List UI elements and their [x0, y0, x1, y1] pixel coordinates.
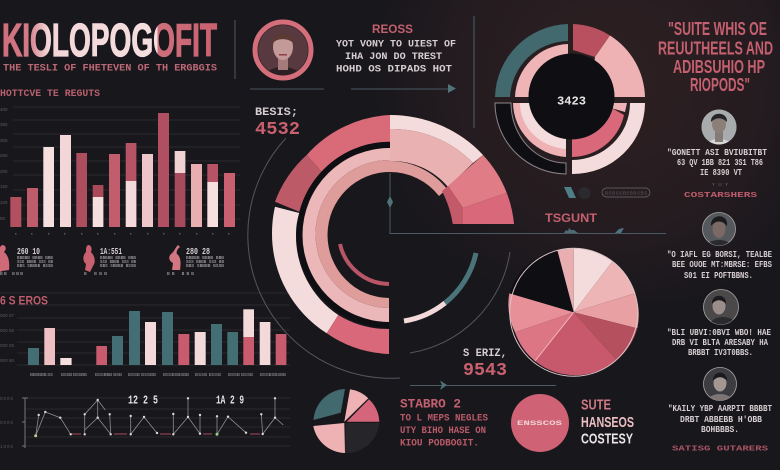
- testimonial 4: [668, 368, 772, 454]
- text block: stabro: [400, 398, 488, 450]
- text block: stabro: TO L MEPS NEGLES: [400, 414, 488, 424]
- testimonial 4: DRBT ABBEBB H'OBB: [680, 415, 763, 425]
- thin arcs around big ring: [248, 138, 510, 378]
- vertical divider after title: [234, 20, 236, 79]
- bar chart: lower: 000 00: [0, 343, 14, 348]
- callout circle: ENSSCOS: [517, 420, 563, 427]
- bar chart: lower: 000 07: [0, 313, 14, 318]
- stat with icon 1: [0, 245, 53, 277]
- stat with icon 2: B BBB: [84, 271, 107, 277]
- stat with icon 1: BB BBB: [0, 271, 23, 277]
- testimonial 1: IE 8390 VT: [700, 168, 742, 178]
- stat with icon 2: BBBBB BBBB BBB: [100, 255, 136, 261]
- section heading: top bar chart: HOTTCVE TE REGUTS: [0, 89, 100, 100]
- stat with icon 2: 1A:551: [100, 247, 122, 257]
- bar chart: top results: [0, 107, 240, 234]
- testimonial 3: BRBBT IV3T0BBS.: [688, 348, 753, 358]
- bar chart: lower: BSSB BSSBB: [128, 372, 156, 377]
- arrow: lower: [410, 380, 556, 390]
- bar chart: top results: 250: [0, 153, 8, 158]
- section heading: lower bar chart: 6 S EROS: [0, 294, 48, 308]
- text block: stabro: UTY BIHO HASE ON: [400, 426, 486, 437]
- divider under portrait: [250, 88, 324, 90]
- bar chart: lower: 000 50: [0, 358, 14, 363]
- text block: suite hanseos costesy: HANSEOS: [581, 414, 634, 431]
- testimonial 2: [667, 212, 772, 281]
- inner arc: light: [404, 303, 445, 321]
- stat with icon 2: [83, 245, 136, 277]
- subtitle: THE TESLI OF FHETEVEN OF TH ERGBGIS: [3, 64, 217, 74]
- bar chart: lower: BSSBBB BSB: [95, 372, 122, 377]
- stat with icon 1: BBS SBBBB BSSB: [17, 263, 53, 269]
- portrait: top circle: [255, 22, 311, 85]
- quote heading: [658, 19, 773, 95]
- testimonial 1: COSTARSHERS: [684, 192, 757, 200]
- stat with icon 3: BBS SBBBB BSSB: [186, 263, 224, 269]
- stat: 9543: [463, 348, 507, 381]
- icon: figure 1: [0, 245, 9, 272]
- testimonial 2: S01 EI POFTBBNS.: [684, 271, 753, 281]
- bar chart: top results: 300: [0, 138, 8, 143]
- bar chart: lower: BSSB BSSB: [228, 372, 253, 377]
- portrait 3: [703, 289, 739, 325]
- stat with icon 1: SSS BBBB SSS BB: [17, 259, 53, 265]
- title: KIOLOPOGOFIT: [2, 14, 217, 66]
- text block: reoss: IHA JON DO TREST: [345, 52, 442, 63]
- quote heading: RIOPODS": [690, 75, 750, 95]
- bar chart: lower: BSSBSBSBB: [260, 372, 286, 377]
- connector line with diamond: [387, 173, 666, 234]
- arrow: top: [351, 84, 456, 93]
- text block: reoss: YOT VONY TO UIEST OF: [336, 40, 456, 50]
- bar chart: top results: 200: [0, 169, 8, 174]
- bar chart: lower: 000 55: [0, 328, 14, 333]
- text block: suite hanseos costesy: SUTE: [581, 396, 611, 414]
- icon: figure 3: [169, 245, 181, 270]
- testimonial 1: Y U Y: [712, 182, 728, 187]
- bar chart: top results: 400: [0, 107, 8, 112]
- pie chart: large: [508, 248, 639, 376]
- donut centre value: 3423: [557, 94, 586, 108]
- bar chart: lower: BSSBSBSBB: [163, 372, 189, 377]
- portrait 1: [702, 110, 736, 144]
- line chart: 1A 2 9: [216, 394, 244, 408]
- pie chart: small: [313, 389, 379, 453]
- bar chart: lower: [0, 293, 290, 377]
- small legend marks: BSBSSBSBBSBS: [605, 190, 647, 196]
- testimonial 3: [667, 290, 771, 358]
- stat with icon 3: BB BBB: [167, 271, 194, 277]
- bar chart: lower: BSSB BSSB: [195, 372, 221, 377]
- text block: suite hanseos costesy: [581, 396, 634, 448]
- line chart: 1000: [0, 444, 13, 449]
- callout circle: [511, 394, 569, 452]
- testimonial 4: SATISG GUTARERS: [672, 446, 768, 454]
- stat: 4532: BESIS;: [255, 107, 298, 119]
- text block: stabro: KIOU PODBOGIT.: [400, 438, 479, 450]
- icon: figure 2: [83, 245, 95, 272]
- bar chart: top results: 50: [0, 216, 6, 221]
- big ring chart: [272, 115, 514, 354]
- stat with icon 1: BBBBB BBBB BBB: [17, 255, 53, 261]
- stat with icon 3: BBBBB BBBB BBB: [186, 255, 224, 261]
- stat: 4532: [255, 107, 300, 140]
- inner arc: teal: [445, 253, 476, 303]
- bar chart: lower: BBSBBB SS: [30, 372, 53, 377]
- vertical divider after text: [473, 16, 475, 128]
- portrait 2: [702, 212, 736, 246]
- text block: reoss: HOHD OS DIPADS HOT: [336, 64, 452, 76]
- testimonial 1: [667, 108, 768, 200]
- stat with icon 3: [167, 245, 224, 277]
- bar chart: top results: 150: [0, 184, 8, 189]
- stat: 9543: 9543: [463, 361, 507, 381]
- testimonial 1: "GONETT ASI BVIUBITBT: [667, 148, 768, 158]
- line chart: 0000: [0, 420, 13, 425]
- bar chart: top results: 100: [0, 200, 8, 205]
- donut chart: top: [495, 24, 645, 174]
- stat with icon 2: SSS BBBB SSS BB: [100, 259, 136, 265]
- text block: reoss: [336, 22, 456, 76]
- heading: tsgunt: TSGUNT: [545, 211, 598, 225]
- bar chart: top results: 350: [0, 122, 8, 127]
- stat with icon 3: 280 28: [186, 247, 210, 257]
- line chart: [0, 394, 290, 449]
- bar chart: lower: BSSB BSSBB: [61, 372, 87, 377]
- stat: 9543: S ERIZ,: [463, 348, 507, 360]
- text block: suite hanseos costesy: COSTESY: [581, 430, 633, 448]
- stat with icon 3: SSS BBBB SSS BB: [186, 259, 224, 265]
- portrait 4: [703, 367, 737, 401]
- line chart: 0000: [0, 396, 13, 401]
- line chart: 12 2 5: [128, 394, 158, 408]
- stat: 4532: 4532: [255, 120, 300, 140]
- stat with icon 1: 260 10: [17, 247, 40, 257]
- testimonial 4: BOHBBBS.: [701, 425, 739, 435]
- small legend marks: [564, 187, 650, 199]
- inner arc: rose: [340, 244, 389, 284]
- stat with icon 2: BBS SBBBB BSSB: [100, 263, 136, 269]
- text block: stabro: STABRO 2: [400, 398, 461, 412]
- text block: reoss: REOSS: [372, 22, 413, 36]
